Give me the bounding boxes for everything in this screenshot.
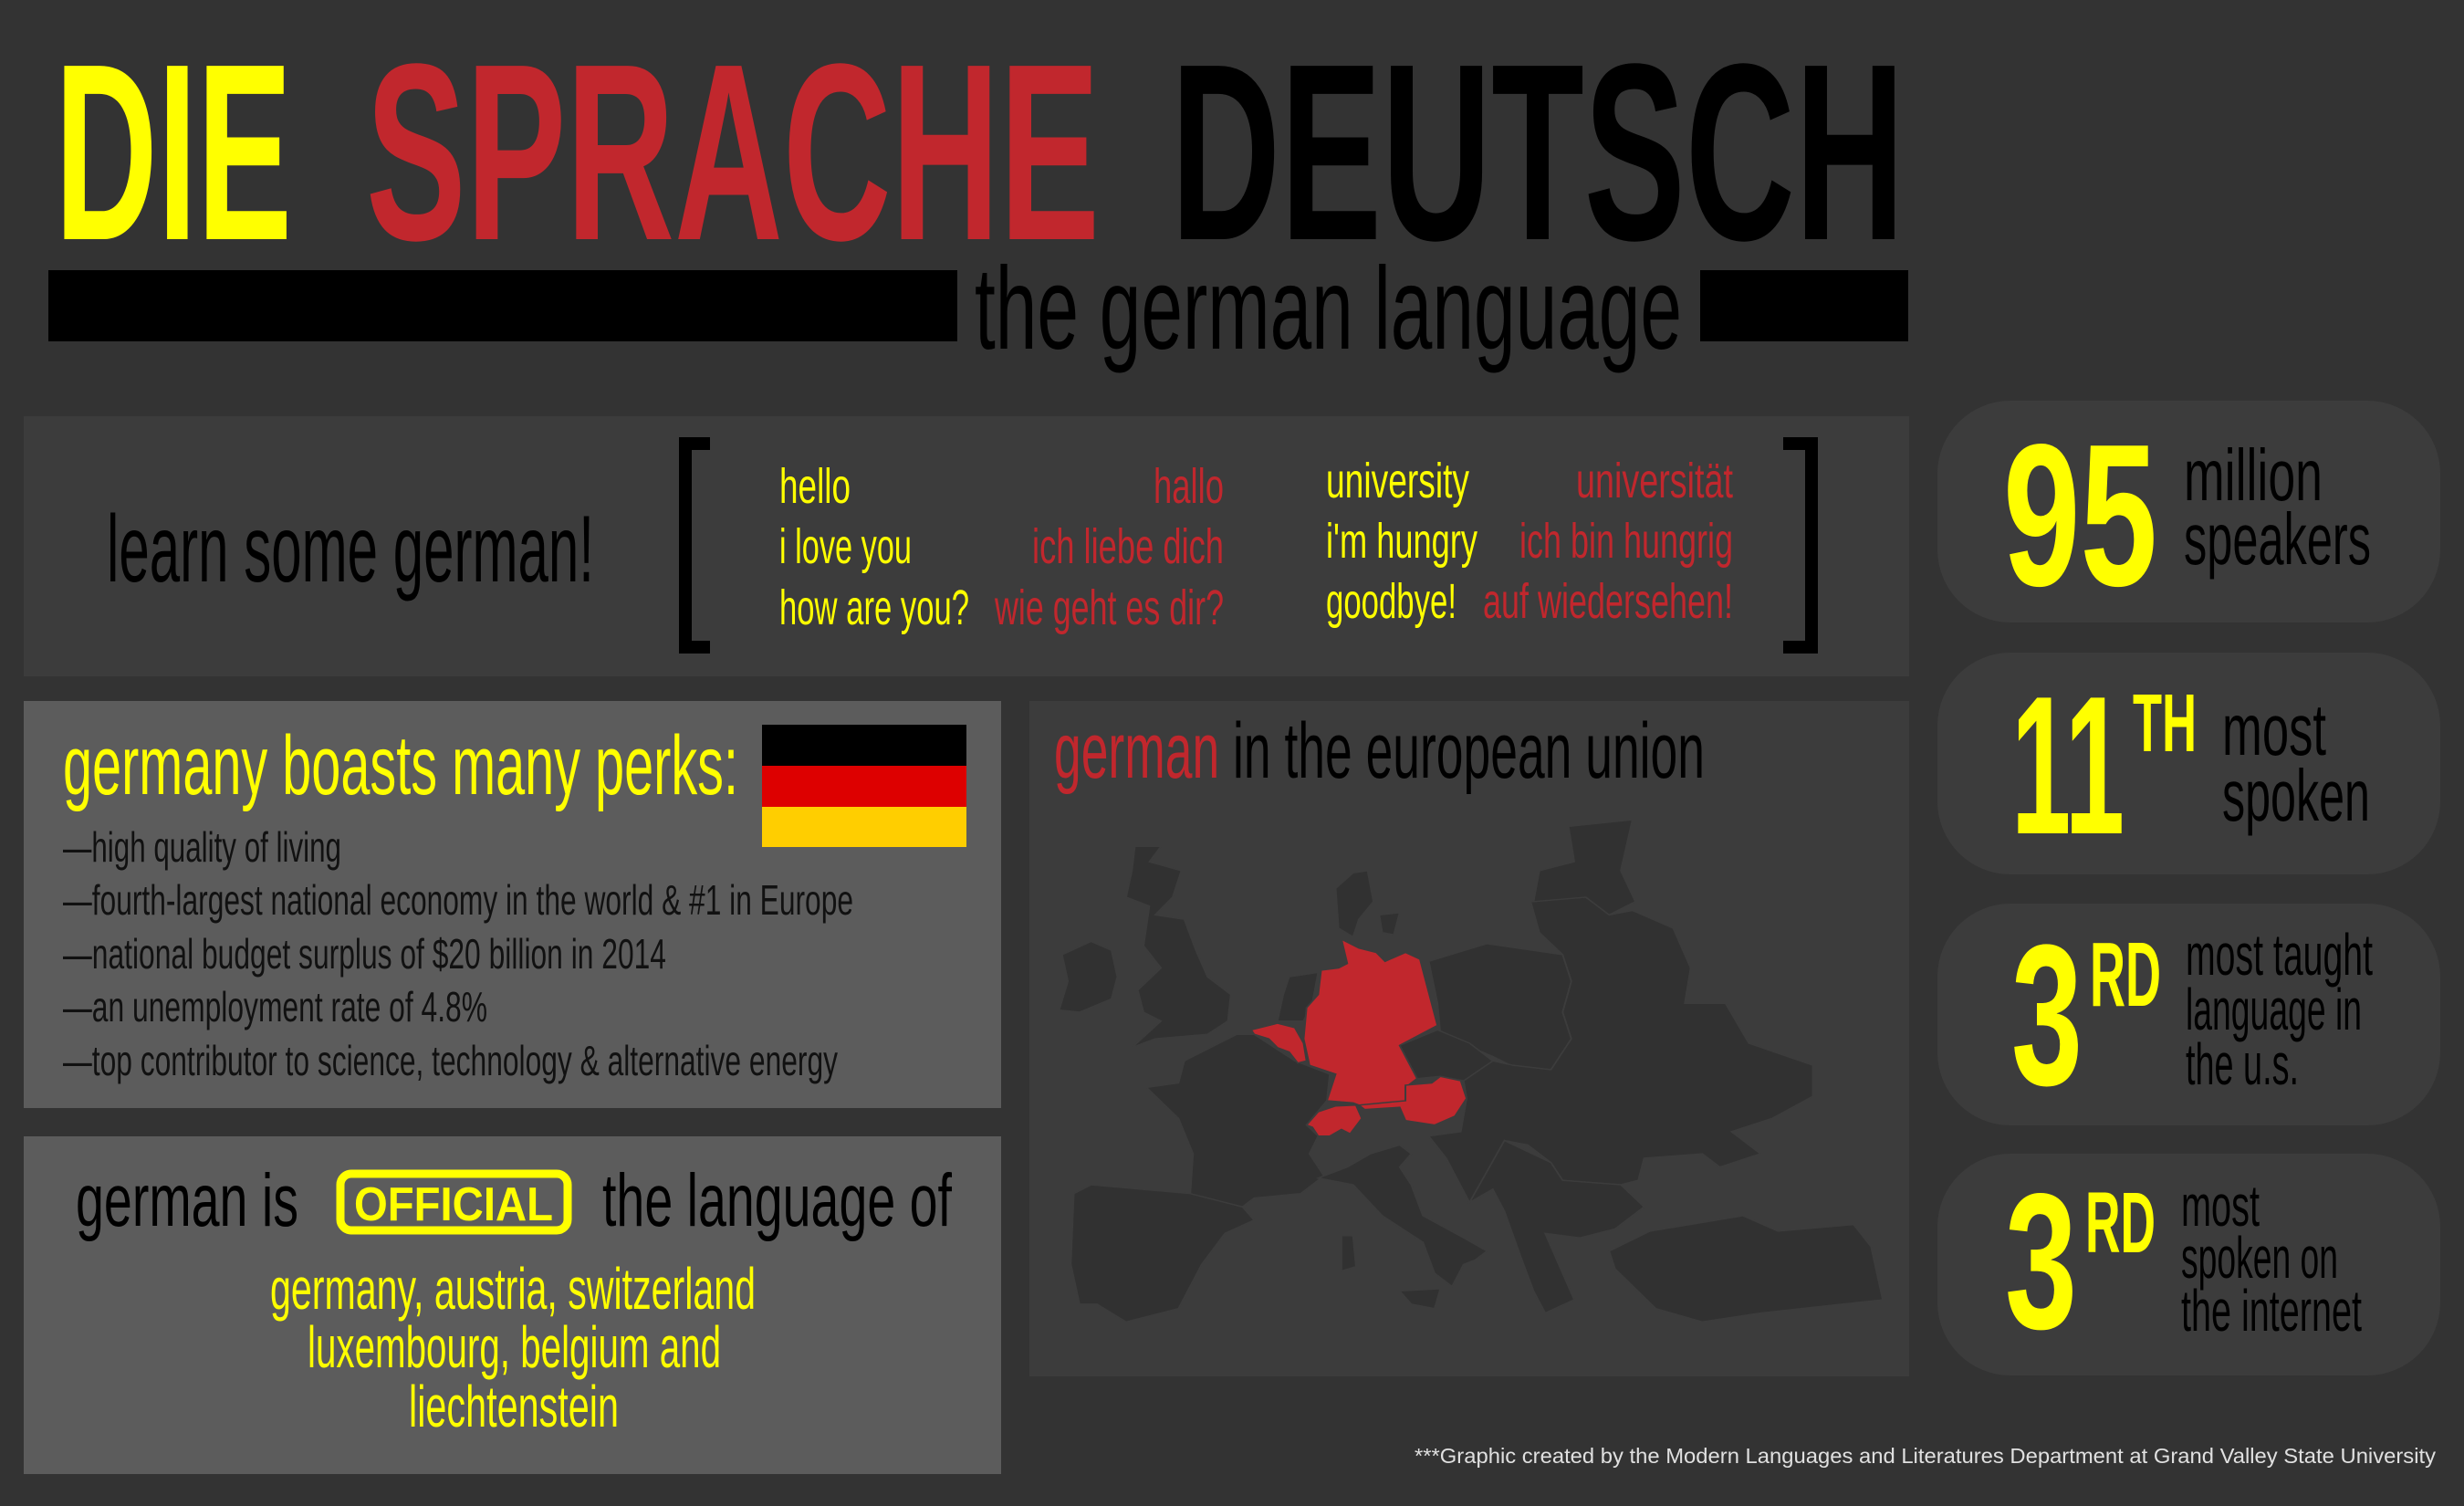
stat: 11th most spoken: most xyxy=(2222,689,2326,770)
stat: 3rd most spoken on internet: 3 xyxy=(2005,1153,2077,1369)
phrase list: hallo xyxy=(1154,459,1224,514)
icon: official stamp: OFFICIAL xyxy=(354,1178,553,1231)
stat: 11th most spoken: 11 xyxy=(2011,654,2125,875)
map: europe xyxy=(1060,820,1883,1322)
perks list: —high quality of living xyxy=(63,823,341,871)
phrase list: i love you xyxy=(779,519,912,574)
panel: map xyxy=(1029,701,1909,1376)
stat: 95 million speakers xyxy=(1937,401,2440,629)
title xyxy=(55,12,1905,293)
stat: 3rd most taught: RD xyxy=(2090,924,2161,1026)
title: DEUTSCH xyxy=(1171,12,1905,293)
phrase list: wie geht es dir? xyxy=(994,580,1224,635)
subtitle bar: the german language xyxy=(975,244,1682,374)
country list xyxy=(270,1256,756,1439)
country list: liechtenstein xyxy=(409,1374,619,1439)
panel: official language: the language of xyxy=(602,1159,952,1242)
panel: official language: german is xyxy=(76,1159,298,1242)
footer credit: ***Graphic created by the Modern Languages and Literatures Department at Grand Valley State University xyxy=(1415,1444,2437,1468)
heading: learn some german: learn some german! xyxy=(107,497,594,602)
heading: map: german in the european union xyxy=(1054,707,1705,795)
stat: 95 million speakers: million xyxy=(2184,434,2323,516)
stat: 3rd most taught: the u.s. xyxy=(2186,1031,2299,1097)
phrase list: goodbye! xyxy=(1326,574,1456,629)
panel: perks xyxy=(24,701,1001,1108)
perks list xyxy=(63,823,853,1084)
stat: 95 million speakers: 95 xyxy=(2003,403,2157,629)
perks list: —top contributor to science, technology & alternative energy xyxy=(63,1037,838,1084)
panel: official language xyxy=(24,1136,1001,1474)
stat: 3rd most taught xyxy=(1937,903,2440,1127)
perks list: —an unemployment rate of 4.8% xyxy=(63,983,487,1030)
stat: 11th most spoken: spoken xyxy=(2222,755,2370,836)
stat: 11th most spoken xyxy=(1937,653,2440,875)
stat: 3rd most spoken on internet: RD xyxy=(2085,1175,2156,1271)
stat: 11th most spoken: TH xyxy=(2133,678,2197,769)
phrase list: i'm hungry xyxy=(1326,514,1477,569)
stat: 3rd most taught: 3 xyxy=(2011,903,2083,1127)
phrase list: university xyxy=(1326,454,1469,508)
heading: perks: germany boasts many perks: xyxy=(63,719,738,812)
country list: luxembourg, belgium and xyxy=(308,1314,721,1380)
perks list: —national budget surplus of $20 billion in 2014 xyxy=(63,930,666,978)
stat: 3rd most spoken on internet: most xyxy=(2181,1173,2260,1239)
subtitle bar xyxy=(48,244,1908,374)
panel: learn some german xyxy=(24,416,1909,676)
phrase list xyxy=(779,454,1733,635)
icon: german flag xyxy=(762,725,966,847)
phrase list: ich liebe dich xyxy=(1032,519,1224,574)
brackets xyxy=(679,437,1818,654)
phrase list: auf wiedersehen! xyxy=(1483,574,1733,629)
phrase list: how are you? xyxy=(779,580,969,635)
country list: germany, austria, switzerland xyxy=(270,1256,756,1322)
phrase list: hello xyxy=(779,459,851,514)
phrase list: ich bin hungrig xyxy=(1519,514,1733,569)
title: DIE xyxy=(55,12,292,293)
phrase list: universität xyxy=(1576,454,1733,508)
title: SPRACHE xyxy=(366,12,1100,293)
perks list: —fourth-largest national economy in the world & #1 in Europe xyxy=(63,876,853,924)
stat: 3rd most spoken on internet: spoken on xyxy=(2181,1225,2338,1291)
stat: 3rd most spoken on internet xyxy=(1937,1153,2440,1375)
